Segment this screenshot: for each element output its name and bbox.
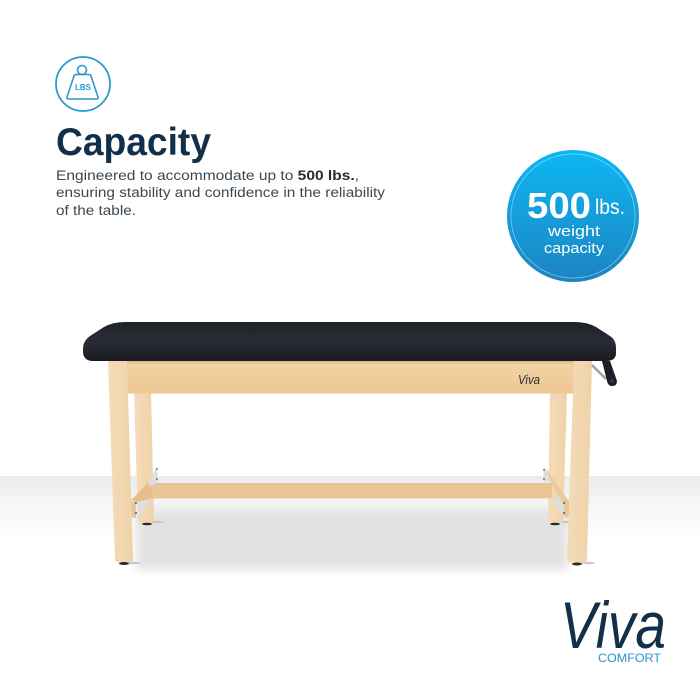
rear legs: [134, 393, 567, 524]
description text: Engineered to accommodate up to 500 lbs. ,: [56, 168, 359, 183]
corner braces: [131, 467, 569, 519]
description text: of the table.: [56, 203, 136, 218]
floor backdrop: [0, 476, 700, 540]
brand logo: Viva Comfort: COMFORT: [598, 653, 661, 665]
description text: [56, 168, 385, 218]
badge: 500 lbs weight capacity: [507, 150, 639, 282]
table: [83, 322, 617, 566]
badge: 500 lbs weight capacity: lbs.: [595, 196, 625, 219]
badge: 500 lbs weight capacity: weight: [547, 223, 601, 240]
cushion: [83, 322, 616, 361]
description text: ensuring stability and confidence in the reliability: [56, 185, 385, 200]
brand logo: Viva Comfort: Viva: [560, 588, 666, 662]
stretcher rail: [150, 483, 552, 498]
badge: 500 lbs weight capacity: 500: [527, 185, 591, 226]
table feet shadows: [123, 521, 595, 564]
paper roll bracket: [592, 361, 617, 386]
badge: 500 lbs weight capacity: capacity: [544, 240, 605, 257]
front legs: [108, 361, 592, 566]
floor shadow under table: [136, 509, 568, 570]
apron logo: Viva: [518, 372, 540, 387]
title: Capacity: [56, 121, 211, 164]
icon: weight with LBS label: [56, 57, 110, 111]
icon: weight with LBS label: LBS: [75, 83, 92, 92]
apron: [126, 361, 576, 394]
